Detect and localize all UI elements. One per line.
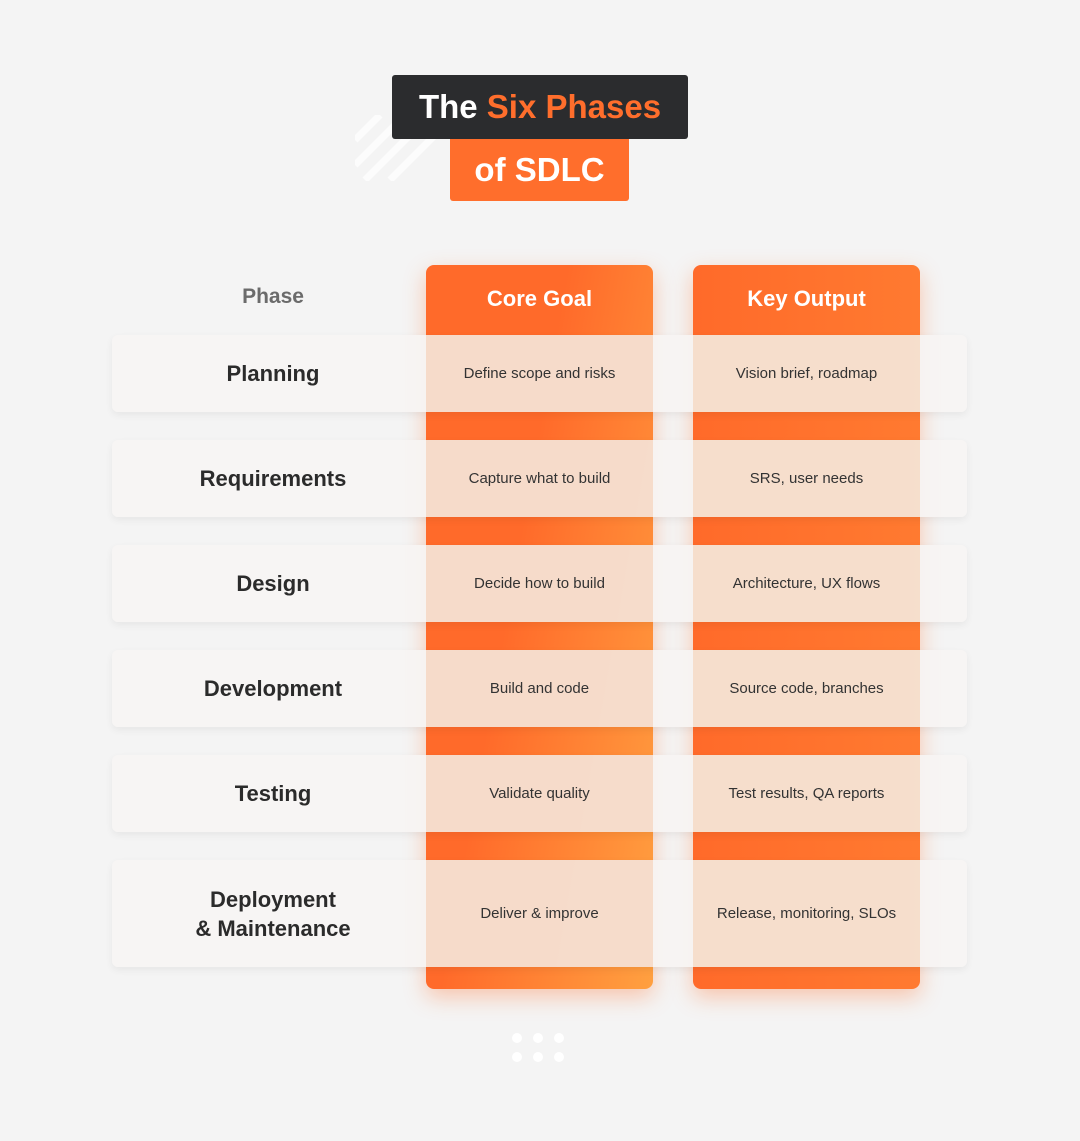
row: development: Development	[204, 676, 342, 701]
column: core goal	[426, 265, 653, 989]
row: development: Source code, branches	[729, 680, 884, 697]
row: design: Decide how to build	[474, 575, 605, 592]
row: requirements: Capture what to build	[469, 470, 610, 487]
row: requirements: Requirements	[200, 466, 346, 491]
row: deployment: Deliver & improve	[480, 905, 599, 922]
row: testing	[112, 755, 967, 832]
row: deployment: & Maintenance	[195, 916, 351, 940]
row: design: Architecture, UX flows	[733, 575, 880, 592]
row: planning: Define scope and risks	[464, 365, 615, 382]
row: design	[112, 545, 967, 622]
title line 1	[392, 75, 688, 139]
column: key output	[693, 265, 920, 989]
row: deployment: Release, monitoring, SLOs	[717, 905, 896, 922]
row: planning	[112, 335, 967, 412]
title line 2: of SDLC	[474, 151, 605, 188]
row: design: Design	[236, 571, 310, 596]
title line 1: Six Phases	[487, 88, 661, 125]
row: development	[112, 650, 967, 727]
row: deployment: Deployment	[210, 886, 336, 912]
decorative stripes	[363, 115, 436, 181]
row: requirements	[112, 440, 967, 517]
row: requirements: SRS, user needs	[750, 470, 863, 487]
header: core goal: Core Goal	[487, 286, 592, 311]
title	[392, 75, 688, 201]
row: development: Build and code	[490, 680, 589, 697]
decorative dots	[512, 1033, 564, 1062]
title line 1: The	[419, 88, 478, 125]
row: testing: Validate quality	[489, 785, 590, 802]
title line 2	[450, 139, 629, 201]
row: testing: Test results, QA reports	[729, 785, 884, 802]
header: phase: Phase	[242, 285, 304, 308]
row: testing: Testing	[235, 781, 311, 806]
row: planning: Planning	[227, 361, 319, 386]
row: planning: Vision brief, roadmap	[736, 365, 877, 382]
header: key output: Key Output	[747, 286, 866, 311]
row: deployment	[112, 860, 967, 967]
